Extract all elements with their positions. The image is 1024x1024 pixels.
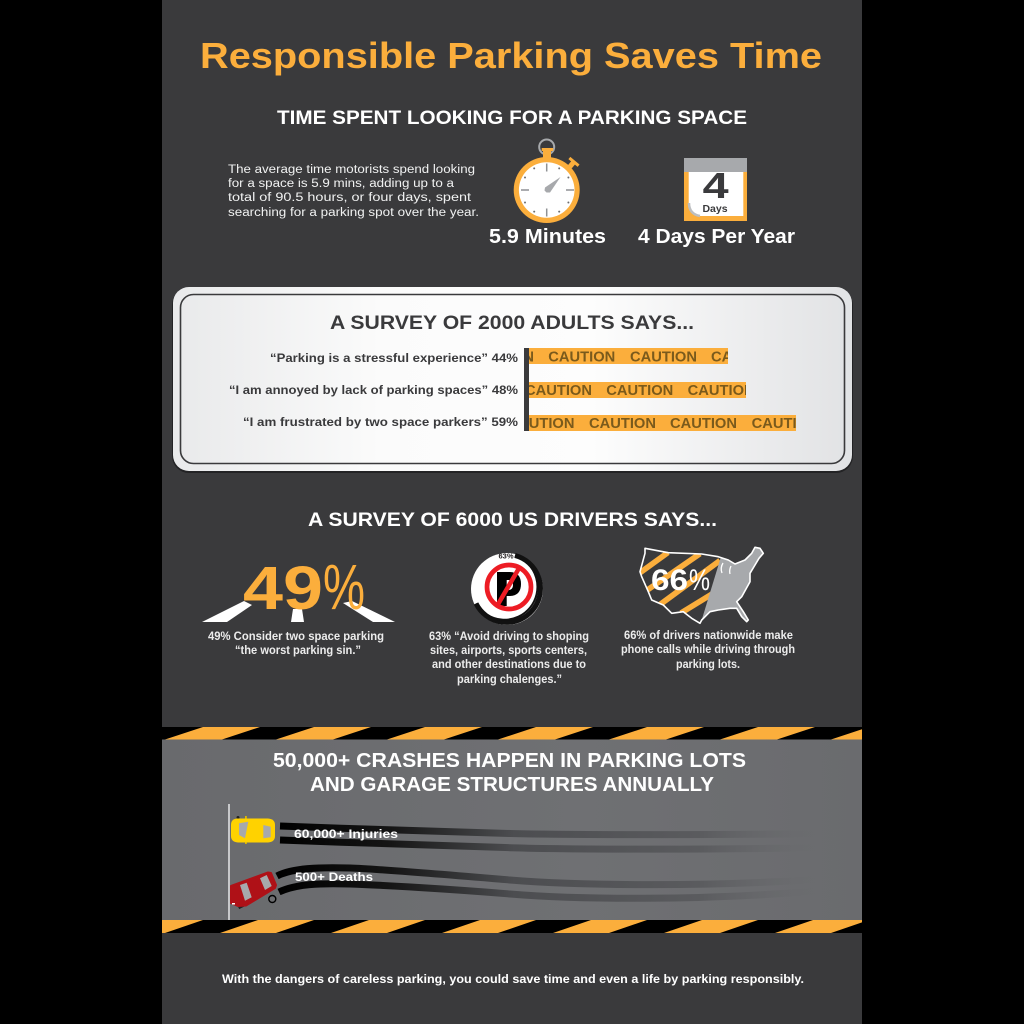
caption: 66%: parking lots. <box>676 659 740 671</box>
icon: no parking sign: 63% <box>498 552 514 560</box>
number: 66% <box>651 564 710 597</box>
icon: stopwatch <box>514 140 580 223</box>
hazard stripe: top <box>162 727 862 740</box>
panel: survey of 2000 adults <box>172 287 853 473</box>
caption: 66% <box>621 630 795 671</box>
label: deaths: 500+ Deaths <box>295 870 373 884</box>
number: 66%: % <box>689 564 710 597</box>
bar chart: caution tape bars: CAUTION <box>548 350 615 366</box>
bar chart: caution tape bars: CAUTION <box>525 383 592 399</box>
caption: 63% <box>429 631 589 686</box>
row labels: “I am frustrated by two space parkers” 59% <box>243 415 518 429</box>
caption: 49% <box>208 631 384 657</box>
label: 4 days per year: 4 Days Per Year <box>638 226 795 248</box>
text block: average time: total of 90.5 hours, or four days, spent <box>228 192 472 204</box>
bar chart: caution tape bars: CAUTION <box>606 383 673 399</box>
bar chart: caution tape bars: CAUTION <box>508 416 574 432</box>
icon: calendar: Days <box>702 203 728 215</box>
icon: red car <box>231 872 276 909</box>
heading: crashes: 50,000+ CRASHES HAPPEN IN PARKING LOTS <box>273 750 746 772</box>
heading: crashes line 2: AND GARAGE STRUCTURES ANNUALLY <box>310 774 715 796</box>
caption: 66%: 66% of drivers nationwide make <box>624 630 793 642</box>
label: injuries: 60,000+ Injuries <box>294 827 398 841</box>
row labels <box>229 351 518 429</box>
icon: calendar <box>684 158 747 221</box>
icon: road lines <box>202 601 395 622</box>
panel: road section <box>162 727 862 933</box>
title: Responsible Parking Saves Time <box>200 35 822 76</box>
caption: 63%: and other destinations due to <box>432 659 586 671</box>
stat: 49 percent <box>202 551 395 657</box>
caption: 49%: “the worst parking sin.” <box>235 645 361 657</box>
bar chart: caution tape bars: CAUTION <box>467 350 534 366</box>
heading: survey of 6000: A SURVEY OF 6000 US DRIVERS SAYS... <box>308 510 717 531</box>
number: 49%: % <box>323 551 365 623</box>
stat: 63 percent <box>429 552 589 686</box>
caption: 63%: 63% “Avoid driving to shoping <box>429 631 589 643</box>
bar chart: caution tape bars: CAUTION <box>752 416 819 432</box>
text block: average time: for a space is 5.9 mins, adding up to a <box>228 178 455 190</box>
caption: 63%: parking chalenges.” <box>457 674 562 686</box>
caption: 63%: sites, airports, sports centers, <box>430 645 587 657</box>
hazard stripe: bottom <box>109 920 869 933</box>
label: 5.9 minutes: 5.9 Minutes <box>489 226 606 248</box>
bar chart: caution tape bars: CAUTION <box>670 416 737 432</box>
caption: 66%: phone calls while driving through <box>621 644 795 656</box>
icon: no parking sign <box>471 552 543 625</box>
heading: time spent: TIME SPENT LOOKING FOR A PARKING SPACE <box>277 108 747 129</box>
section: time spent <box>228 108 795 248</box>
text block: average time: The average time motorists spend looking <box>228 164 475 176</box>
row labels: “Parking is a stressful experience” 44% <box>270 351 518 365</box>
page background <box>162 0 862 1024</box>
row labels: “I am annoyed by lack of parking spaces” 48% <box>229 383 518 397</box>
bar chart: caution tape bars: CAUTION <box>688 383 755 399</box>
number: 66%: 66 <box>651 564 688 597</box>
number: 49%: 49 <box>243 554 323 622</box>
icon: yellow car <box>231 816 275 844</box>
icon: US map <box>639 547 763 623</box>
bar chart: caution tape bars <box>524 348 796 431</box>
heading: survey of 2000: A SURVEY OF 2000 ADULTS SAYS... <box>330 313 694 334</box>
bar chart: caution tape bars: CAUTION <box>630 350 697 366</box>
footer text: With the dangers of careless parking, you could save time and even a life by parking responsibly. <box>222 972 804 986</box>
icon: calendar: 4 <box>703 165 729 206</box>
curb line <box>228 804 230 920</box>
bar chart: caution tape bars: CAUTION <box>589 416 656 432</box>
skid marks <box>277 826 838 898</box>
text block: average time: searching for a parking spot over the year. <box>228 207 479 219</box>
stat: 66 percent <box>621 547 795 671</box>
caption: 49%: 49% Consider two space parking <box>208 631 384 643</box>
number: 49% <box>243 551 365 623</box>
text block: average time <box>228 164 479 219</box>
bar chart: caution tape bars: CAUTION <box>711 350 778 366</box>
